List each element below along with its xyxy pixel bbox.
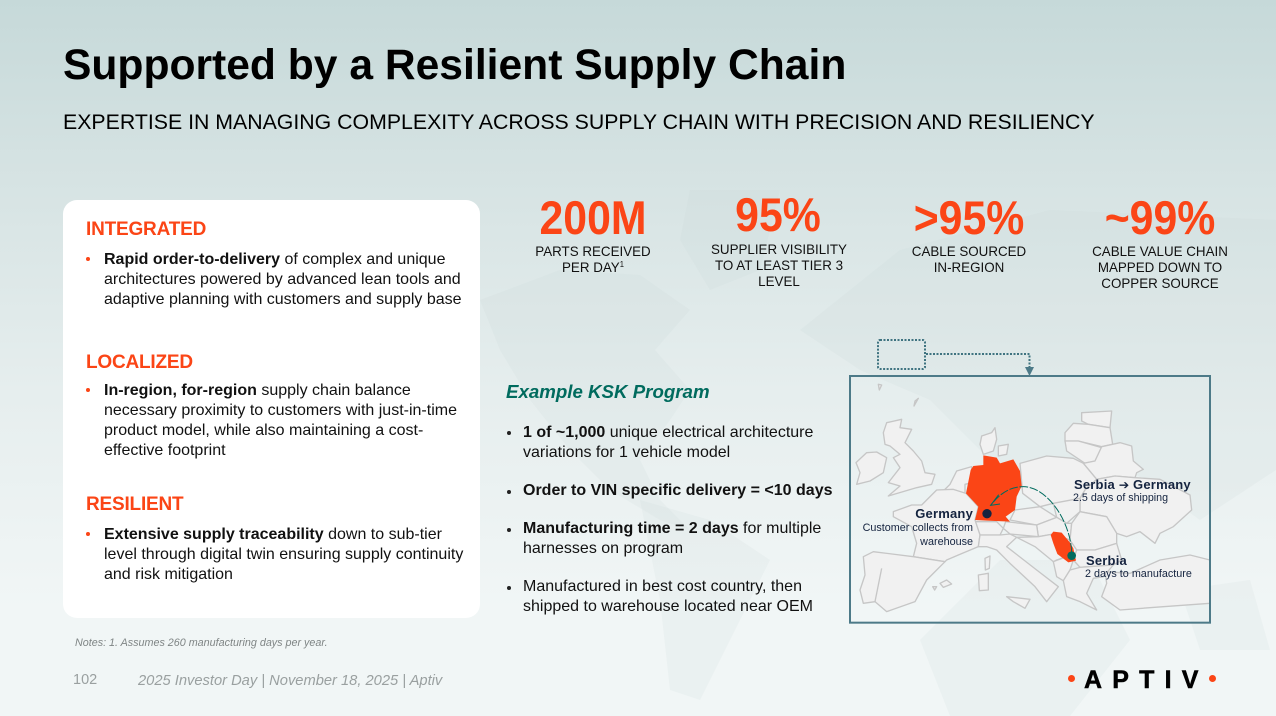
text: integrated: adaptive planning with customers and supply base bbox=[104, 291, 462, 308]
marker: Serbia bbox=[1067, 551, 1076, 560]
stat: 95%: SUPPLIER VISIBILITY bbox=[711, 241, 847, 257]
label: Germany: Customer collects from bbox=[863, 522, 973, 534]
stat: ~99%: ~99% bbox=[1105, 191, 1215, 244]
stat: >95%: >95% bbox=[914, 191, 1024, 244]
text: example program bullets: shipped to warehouse located near OEM bbox=[523, 598, 813, 615]
text: example program bullets: 1 of ~1,000 unique electrical architecture bbox=[523, 424, 813, 441]
text: integrated: architectures powered by advanced lean tools and bbox=[104, 271, 461, 288]
title: Supported by a Resilient Supply Chain bbox=[63, 41, 846, 89]
stat: 200M: PER DAY1 bbox=[562, 259, 624, 275]
Germany highlighted bbox=[966, 455, 1022, 522]
text: resilient bbox=[86, 526, 464, 583]
label: Serbia to Germany bbox=[1073, 477, 1191, 504]
stat: >95% bbox=[912, 191, 1026, 275]
marker: Germany bbox=[982, 509, 992, 518]
text: resilient: Extensive supply traceability down to sub-tier bbox=[104, 526, 442, 543]
text: resilient: level through digital twin ensuring supply continuity bbox=[104, 546, 463, 563]
text: resilient: and risk mitigation bbox=[104, 566, 233, 583]
label: Germany bbox=[863, 506, 973, 548]
text: localized: In-region, for-region supply chain balance bbox=[104, 382, 411, 399]
footnote: Notes: 1. Assumes 260 manufacturing days per year. bbox=[75, 637, 328, 649]
label: Germany: warehouse bbox=[920, 536, 973, 548]
stat: 95% bbox=[711, 188, 847, 289]
label: Serbia to Germany: Serbia ➔ Germany bbox=[1074, 477, 1191, 492]
frame bbox=[850, 376, 1210, 623]
label: Serbia to Germany: 2.5 days of shipping bbox=[1073, 492, 1168, 504]
text: integrated bbox=[86, 251, 462, 308]
stat: 200M bbox=[535, 191, 651, 275]
text: integrated: Rapid order-to-delivery of complex and unique bbox=[104, 251, 445, 268]
label: Serbia bbox=[1085, 553, 1192, 580]
logo: Aptiv: APTIV bbox=[1084, 666, 1209, 694]
text: example program bullets: Order to VIN specific delivery = <10 days bbox=[523, 482, 832, 499]
text: example program bullets bbox=[507, 424, 832, 615]
text: example program bullets: Manufactured in best cost country, then bbox=[523, 578, 802, 595]
label: Germany: Germany bbox=[915, 506, 973, 521]
stat: >95%: CABLE SOURCED bbox=[912, 243, 1026, 259]
label: Serbia: Serbia bbox=[1086, 553, 1127, 568]
heading: example program: Example KSK Program bbox=[506, 381, 710, 402]
stat: 95%: 95% bbox=[735, 188, 821, 241]
shipping route arrow bbox=[991, 487, 1072, 552]
text: localized: necessary proximity to customers with just-in-time bbox=[104, 402, 457, 419]
panel: pillars bbox=[63, 200, 480, 618]
subtitle: EXPERTISE IN MANAGING COMPLEXITY ACROSS SUPPLY CHAIN WITH PRECISION AND RESILIENCY bbox=[63, 110, 1095, 134]
text: localized: effective footprint bbox=[104, 442, 226, 459]
text: localized bbox=[86, 382, 457, 459]
stat: 200M: PARTS RECEIVED bbox=[535, 243, 651, 259]
stat: >95%: IN-REGION bbox=[934, 259, 1004, 275]
stat: ~99%: MAPPED DOWN TO bbox=[1098, 259, 1222, 275]
stat: ~99%: CABLE VALUE CHAIN bbox=[1092, 243, 1228, 259]
land bbox=[856, 384, 1210, 612]
text: example program bullets: Manufacturing time = 2 days for multiple bbox=[523, 520, 821, 537]
footer text: 2025 Investor Day | November 18, 2025 | Aptiv bbox=[138, 673, 442, 689]
callout: locator box and dotted arrow bbox=[877, 339, 1034, 375]
page number: 102 bbox=[73, 672, 97, 688]
heading: resilient: RESILIENT bbox=[86, 494, 183, 515]
label: Serbia: 2 days to manufacture bbox=[1085, 568, 1192, 580]
stat: 200M: 200M bbox=[539, 191, 646, 244]
stat: 95%: TO AT LEAST TIER 3 bbox=[715, 257, 843, 273]
stat: ~99%: COPPER SOURCE bbox=[1101, 275, 1219, 291]
text: example program bullets: variations for 1 vehicle model bbox=[523, 444, 730, 461]
map: Europe bbox=[849, 375, 1211, 624]
heading: localized: LOCALIZED bbox=[86, 352, 193, 373]
text: localized: product model, while also maintaining a cost- bbox=[104, 422, 423, 439]
stat: 95%: LEVEL bbox=[758, 273, 800, 289]
heading: integrated: INTEGRATED bbox=[86, 219, 206, 240]
stat: ~99% bbox=[1092, 191, 1228, 291]
text: example program bullets: harnesses on program bbox=[523, 540, 683, 557]
Serbia highlighted bbox=[1051, 532, 1076, 562]
